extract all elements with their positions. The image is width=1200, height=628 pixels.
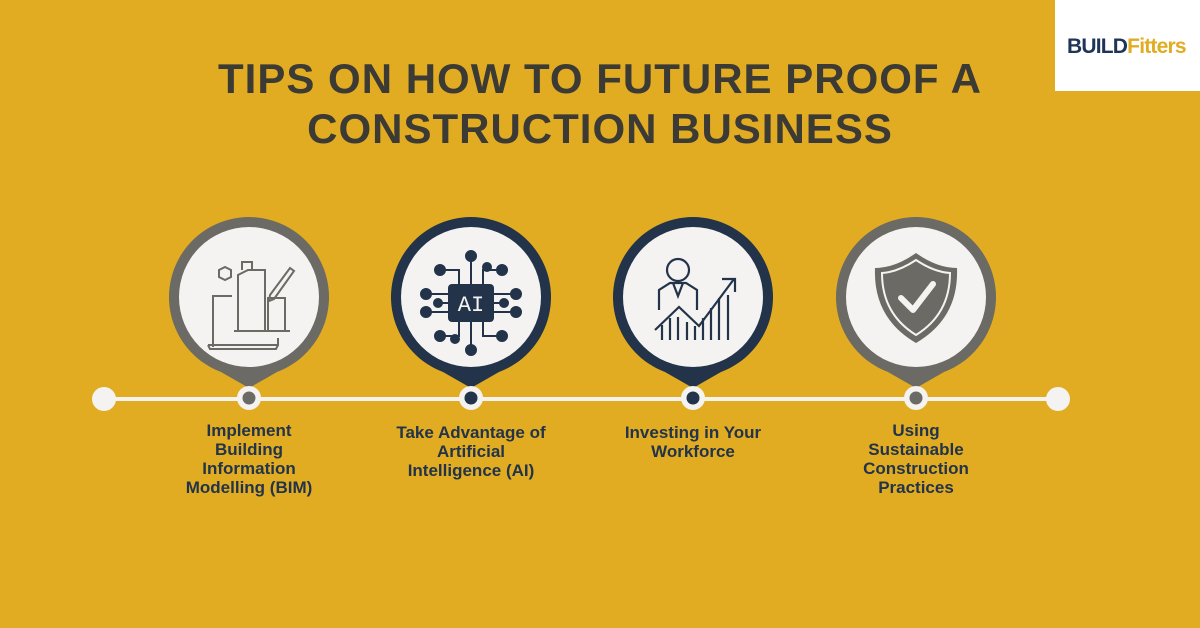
- logo: [1055, 0, 1200, 91]
- title: CONSTRUCTION BUSINESS: [307, 105, 893, 152]
- label 2: Take Advantage of Artificial Intelligence (AI): [396, 423, 546, 480]
- pin 2: AI: AI: [458, 293, 484, 318]
- logo: BUILDFitters: [1067, 35, 1186, 58]
- pin 3: workforce: [613, 217, 773, 410]
- title: TIPS ON HOW TO FUTURE PROOF A: [218, 55, 982, 102]
- label 4: Using Sustainable Construction Practices: [863, 421, 969, 497]
- timeline line: [92, 387, 1070, 411]
- pin 4: sustainable: [836, 217, 996, 410]
- label 1: Implement Building Information Modelling (BIM): [186, 421, 312, 497]
- pin 1: BIM: [169, 217, 329, 410]
- title: [218, 55, 982, 152]
- pin 2: AI: [391, 217, 551, 410]
- label 3: Investing in Your Workforce: [625, 423, 761, 461]
